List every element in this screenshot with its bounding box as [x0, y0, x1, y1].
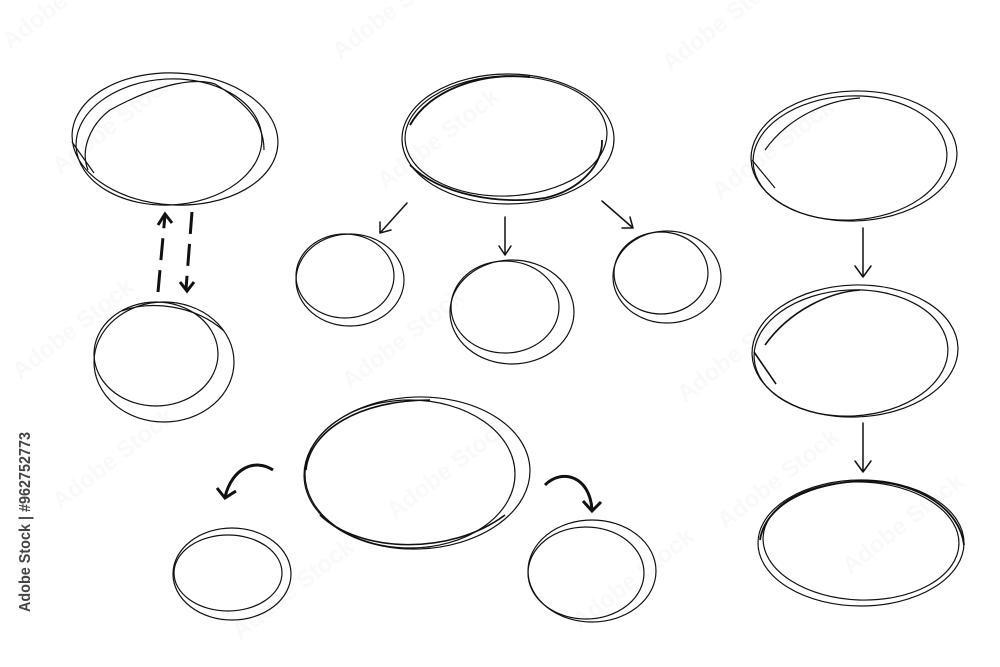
scribble circle: bottom left small — [173, 528, 291, 620]
scribble circle: bottom right large — [758, 479, 964, 606]
watermark pattern: Adobe Stock — [7, 273, 140, 385]
scribble circle: top left large — [69, 68, 281, 210]
scribble circle: lower left — [94, 302, 234, 422]
watermark pattern: Adobe Stock — [372, 83, 505, 195]
curved arrow: bottom left — [217, 465, 273, 498]
watermark pattern: Adobe Stock — [837, 468, 970, 580]
watermark pattern: Adobe Stock — [47, 403, 180, 515]
watermark pattern: Adobe Stock — [567, 523, 700, 635]
scribble circle: middle right large — [750, 281, 960, 421]
watermark pattern: Adobe Stock — [337, 283, 470, 395]
dashed arrow: upward — [158, 214, 172, 292]
watermark pattern: Adobe Stock — [707, 93, 840, 205]
dashed arrow: downward — [180, 212, 194, 291]
arrow: top right to middle right — [855, 228, 871, 277]
stock credit text: Adobe Stock | #962752773 — [17, 432, 34, 612]
scribble circle: bottom right small — [528, 520, 656, 622]
scribble circle: top right large — [749, 87, 959, 225]
scribble circle: top centre large — [402, 73, 614, 204]
watermark pattern: Adobe Stock — [47, 68, 180, 180]
arrow: to middle circle — [499, 217, 511, 255]
arrow: middle right to bottom right — [855, 423, 871, 472]
watermark pattern: Adobe Stock — [227, 533, 360, 645]
scribble circle: bottom centre large — [301, 393, 533, 553]
watermark pattern: Adobe Stock — [672, 296, 805, 408]
watermark pattern: Adobe Stock — [382, 413, 515, 525]
scribble circle: centre left small — [296, 234, 404, 326]
scribble circle: centre right small — [613, 231, 721, 323]
curved arrow: bottom right — [545, 476, 601, 511]
scribble circle: centre middle small — [450, 260, 574, 364]
watermark pattern: Adobe Stock — [712, 423, 845, 535]
arrow: to left circle — [380, 203, 407, 233]
arrow: to right circle — [602, 201, 633, 228]
